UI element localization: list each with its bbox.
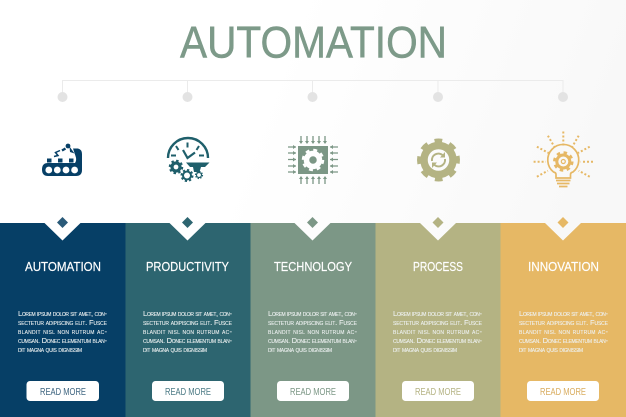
body text: Lorem ipsum dolor sit amet, con-: [18, 309, 107, 318]
marker diamond: [182, 217, 193, 228]
button: READ MORE: [40, 387, 86, 398]
panel: process: [376, 217, 500, 417]
body text: dit magna quis dignissim: [143, 345, 207, 354]
panel: productivity: [126, 217, 250, 417]
button: READ MORE: [415, 387, 461, 398]
timeline connector: [58, 80, 568, 102]
body text: [143, 309, 233, 354]
body text: Lorem ipsum dolor sit amet, con-: [143, 309, 232, 318]
button: READ MORE: [540, 387, 586, 398]
button: [26, 381, 99, 401]
panel: automation: [0, 217, 126, 417]
panel: innovation: [500, 217, 626, 417]
icon: gear with sync arrows: [416, 137, 461, 183]
body text: Lorem ipsum dolor sit amet, con-: [268, 309, 357, 318]
heading: INNOVATION: [528, 259, 599, 274]
body text: blandit nisl non rutrum ac-: [268, 327, 357, 336]
body text: cumsan. Donec elementum blan-: [393, 336, 482, 345]
button: [152, 381, 224, 401]
marker diamond: [307, 217, 318, 228]
body text: blandit nisl non rutrum ac-: [18, 327, 107, 336]
body text: blandit nisl non rutrum ac-: [393, 327, 482, 336]
panel: technology: [250, 217, 376, 417]
body text: blandit nisl non rutrum ac-: [519, 327, 608, 336]
body text: cumsan. Donec elementum blan-: [268, 336, 357, 345]
icon: light bulb with gear: [534, 132, 593, 186]
body text: sectetur adipiscing elit. Fusce: [143, 318, 233, 327]
marker diamond: [558, 217, 568, 228]
body text: blandit nisl non rutrum ac-: [143, 327, 232, 336]
heading: AUTOMATION: [25, 259, 101, 274]
body text: Lorem ipsum dolor sit amet, con-: [393, 309, 482, 318]
body text: cumsan. Donec elementum blan-: [519, 336, 608, 345]
heading: PROCESS: [413, 259, 463, 274]
body text: dit magna quis dignissim: [519, 345, 583, 354]
body text: dit magna quis dignissim: [393, 345, 457, 354]
icon: clock with gears: [168, 138, 210, 181]
body text: dit magna quis dignissim: [18, 345, 82, 354]
body text: sectetur adipiscing elit. Fusce: [268, 318, 358, 327]
title: AUTOMATION: [180, 19, 447, 68]
heading: TECHNOLOGY: [274, 259, 352, 274]
button: [277, 381, 349, 401]
marker diamond: [57, 217, 68, 228]
button: [402, 381, 474, 401]
body text: dit magna quis dignissim: [268, 345, 332, 354]
body text: Lorem ipsum dolor sit amet, con-: [519, 309, 608, 318]
body text: [18, 309, 108, 354]
marker diamond: [432, 217, 444, 228]
heading: PRODUCTIVITY: [146, 259, 229, 274]
body text: sectetur adipiscing elit. Fusce: [18, 318, 108, 327]
body text: cumsan. Donec elementum blan-: [18, 336, 107, 345]
body text: sectetur adipiscing elit. Fusce: [393, 318, 483, 327]
body text: [393, 309, 483, 354]
button: READ MORE: [290, 387, 336, 398]
button: [527, 381, 599, 401]
body text: sectetur adipiscing elit. Fusce: [519, 318, 609, 327]
body text: cumsan. Donec elementum blan-: [143, 336, 232, 345]
icon: conveyor belt with robot arm: [42, 144, 82, 176]
body text: [268, 309, 358, 354]
body text: [519, 309, 609, 354]
icon: processor chip with gear: [288, 136, 338, 184]
button: READ MORE: [165, 387, 211, 398]
